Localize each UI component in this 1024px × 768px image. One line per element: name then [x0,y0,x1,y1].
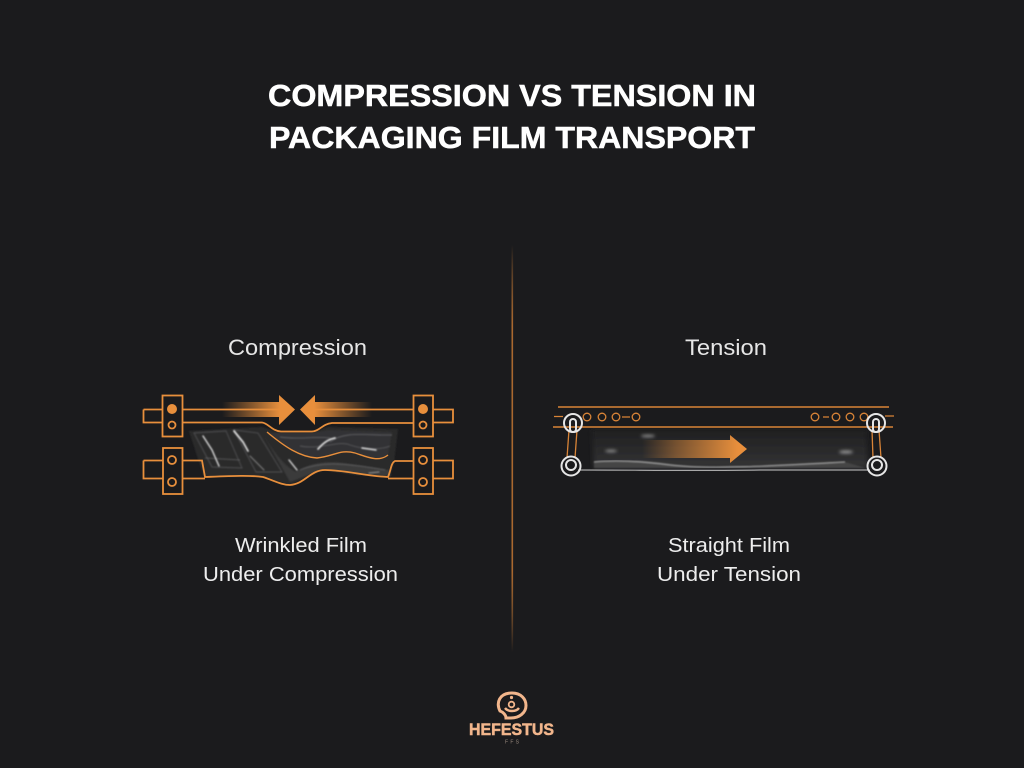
top rails [553,407,893,427]
caption: straight film [657,535,801,586]
bottom left clamp [163,448,182,494]
bottom rails and film outline [144,460,453,485]
right rollers [867,414,886,476]
panel: compression [144,335,453,586]
wrinkled film body [189,427,398,485]
diagram: straight film [553,407,894,476]
caption: wrinkled film: Under Compression [203,564,398,586]
straight film body [578,430,870,470]
caption: wrinkled film [203,535,398,586]
film middle crease [267,432,388,459]
roller holes right [811,413,894,421]
title: PACKAGING FILM TRANSPORT [269,121,755,155]
logo subtext: FFS [505,740,520,746]
logo icon [498,693,526,718]
caption: straight film: Under Tension [657,564,801,586]
top rail left [144,410,453,432]
caption: straight film: Straight Film [668,535,790,557]
diagram: wrinkled film [144,395,453,494]
panel: tension [553,335,894,586]
arrow: tension direction [642,435,747,463]
caption: wrinkled film: Wrinkled Film [235,535,367,557]
roller holes left [554,413,640,421]
top right clamp [414,396,433,436]
bottom right clamp [414,448,433,494]
left rollers [562,414,582,476]
top left clamp [162,396,182,436]
heading: tension: Tension [685,335,767,360]
side links [567,430,881,458]
logo: Hefestus [469,693,554,746]
arrow: pushing left [300,395,372,425]
center divider [512,245,513,652]
arrow: pushing right [222,395,295,425]
title: COMPRESSION VS TENSION IN [268,79,756,113]
heading: compression: Compression [228,335,367,360]
logo wordmark: HEFESTUS [469,721,554,739]
title [268,79,756,155]
